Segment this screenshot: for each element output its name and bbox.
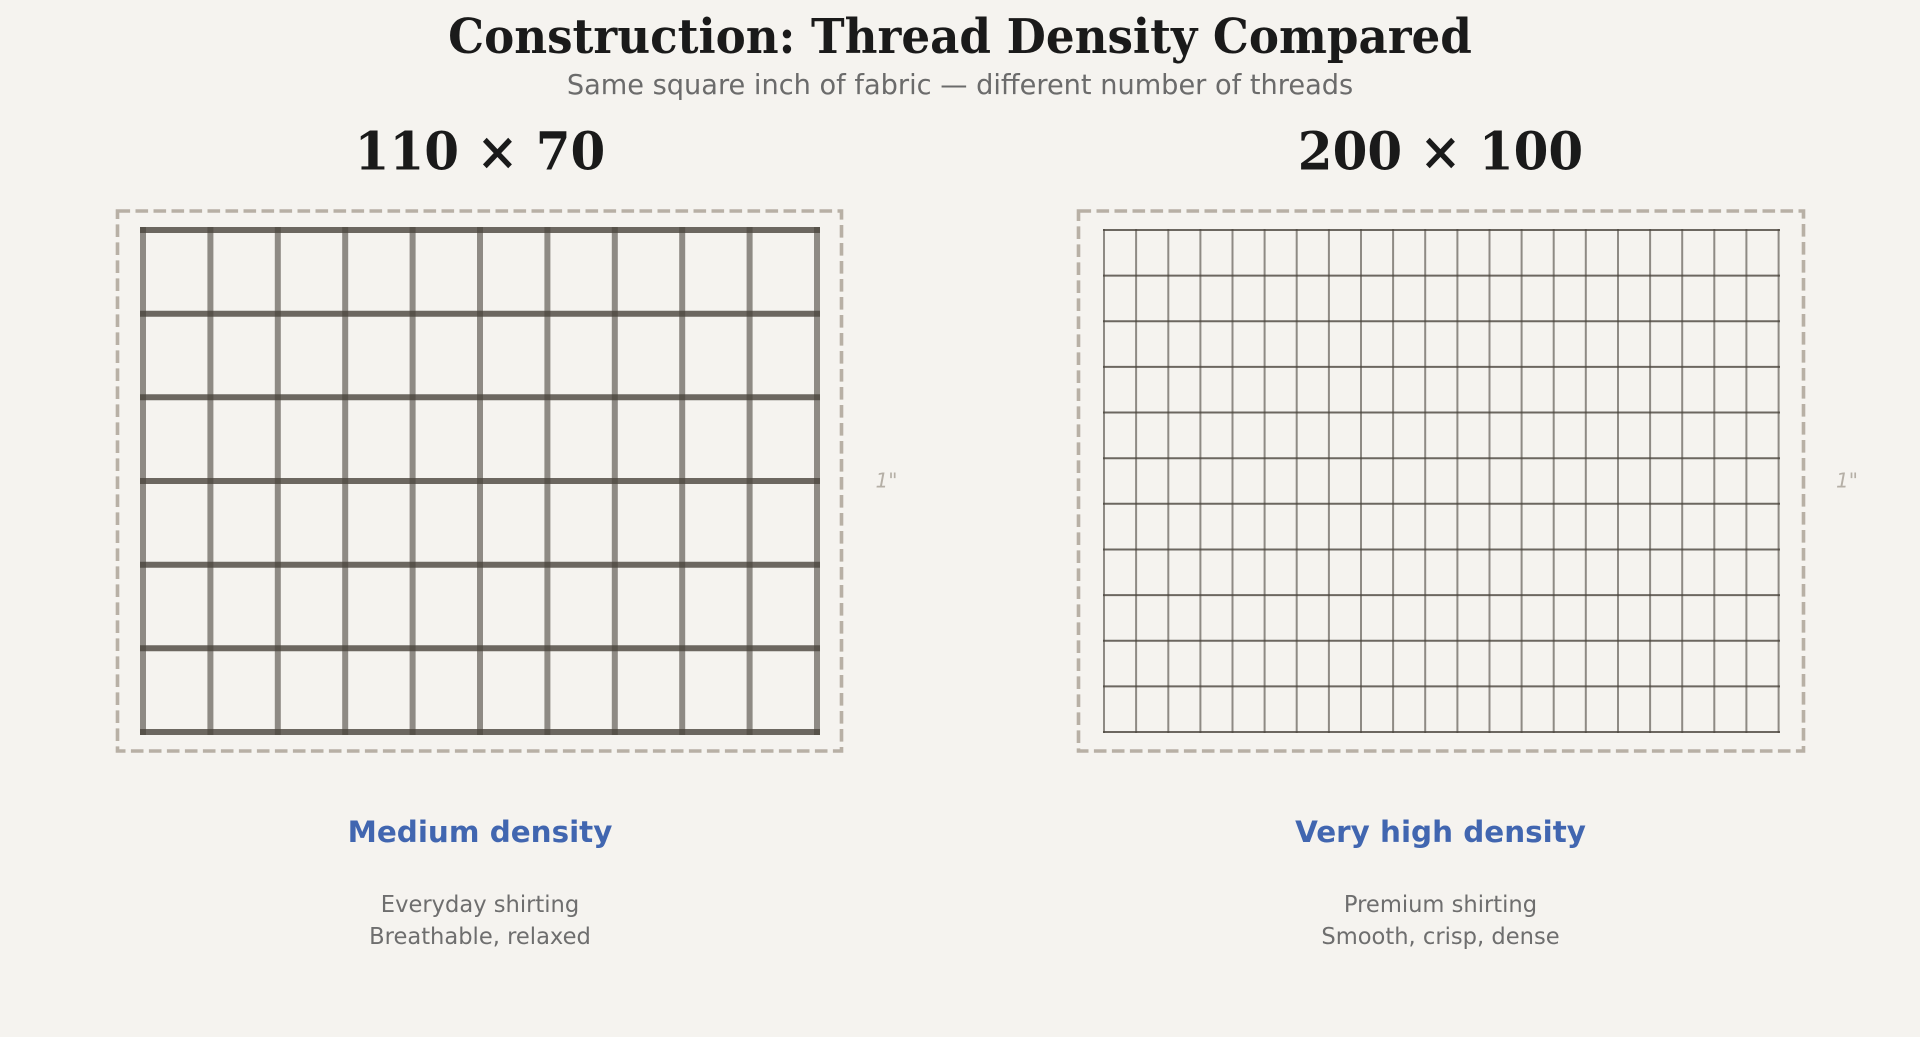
description: Everyday shirting <box>381 892 579 918</box>
title: Construction: Thread Density Compared <box>448 8 1472 64</box>
square inch dashed frame <box>1078 211 1804 751</box>
description <box>369 892 591 950</box>
subtitle: Same square inch of fabric — different number of threads <box>567 70 1353 101</box>
description: Premium shirting <box>1344 892 1537 918</box>
fabric grid: very high density <box>1103 229 1780 733</box>
description: Smooth, crisp, dense <box>1321 924 1560 950</box>
dimension label: 1 inch: 1" <box>876 468 897 492</box>
panel: 200 x 100 <box>1078 122 1858 950</box>
dimension label: 1 inch: 1" <box>1836 468 1858 492</box>
density label: Medium density <box>348 815 612 849</box>
description: Breathable, relaxed <box>369 924 591 950</box>
panel: 110 x 70 <box>118 122 897 950</box>
density label: Very high density <box>1295 815 1586 849</box>
square inch dashed frame <box>118 211 842 751</box>
fabric grid: medium density <box>140 227 820 735</box>
heading: 110 x 70: 110 × 70 <box>355 122 605 183</box>
heading: 200 x 100: 200 × 100 <box>1298 122 1583 183</box>
description <box>1321 892 1560 950</box>
